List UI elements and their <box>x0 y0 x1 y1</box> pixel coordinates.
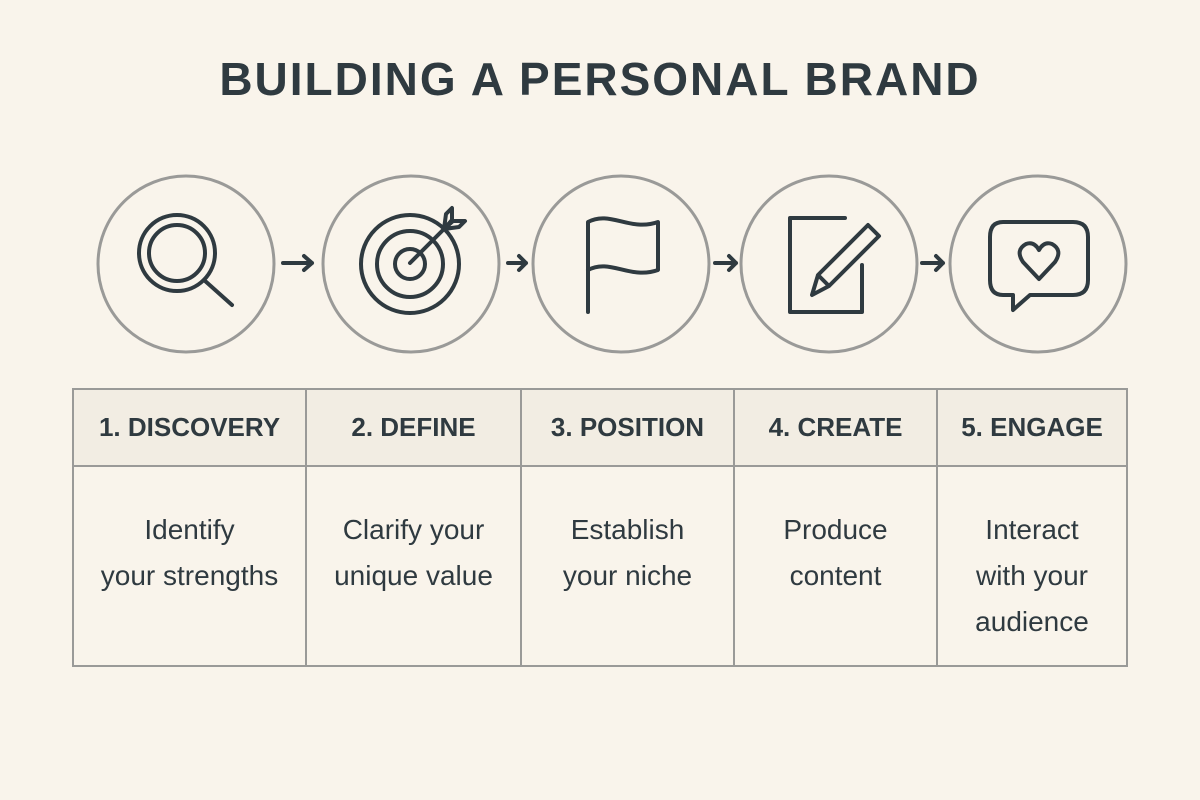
column: define: unique value <box>334 560 493 591</box>
arrow 4 <box>922 256 943 270</box>
column: define <box>307 390 522 665</box>
icon: edit <box>741 176 917 352</box>
column: create: 4. CREATE <box>769 412 902 442</box>
column: position: your niche <box>563 560 692 591</box>
arrow 3 <box>715 256 736 270</box>
column: engage: with your <box>976 560 1088 591</box>
process icons row <box>96 174 1128 354</box>
column: create: content <box>790 560 881 591</box>
title: BUILDING A PERSONAL BRAND <box>219 53 981 105</box>
column: discovery: your strengths <box>101 560 278 591</box>
column: discovery: Identify <box>144 514 235 545</box>
column: create <box>735 390 938 665</box>
column: discovery: 1. DISCOVERY <box>99 412 280 442</box>
steps table <box>72 388 1128 667</box>
icon: target <box>323 176 499 352</box>
column: engage <box>938 412 1126 637</box>
icon: magnifier <box>98 176 274 352</box>
icon: flag <box>533 176 709 352</box>
column: position <box>522 390 735 665</box>
column: position: Establish <box>571 514 684 545</box>
column: position: 3. POSITION <box>551 412 704 442</box>
column: engage: 5. ENGAGE <box>961 412 1103 442</box>
column: engage: Interact <box>985 514 1079 545</box>
arrow 1 <box>283 256 312 270</box>
icon: chat heart <box>950 176 1126 352</box>
column: discovery <box>74 390 307 665</box>
column: define: 2. DEFINE <box>351 412 476 442</box>
arrow 2 <box>508 256 526 270</box>
column: create: Produce <box>783 514 888 545</box>
column: engage: audience <box>975 606 1089 637</box>
column: define: Clarify your <box>343 514 484 545</box>
